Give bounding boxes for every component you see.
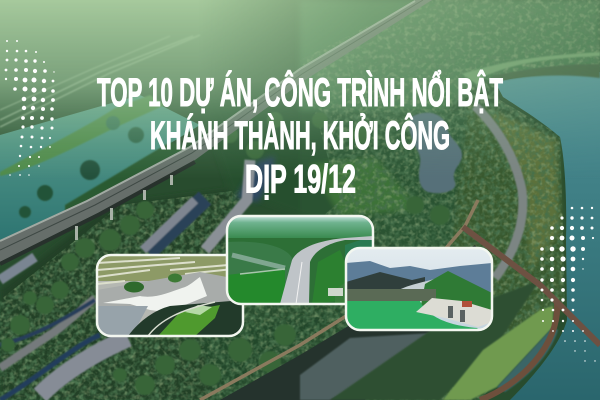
halftone dots left — [5, 40, 55, 176]
tree clumps — [1, 112, 450, 395]
pale service road along lake — [475, 106, 523, 278]
left island — [0, 95, 165, 176]
central dark pond — [236, 156, 275, 202]
inner lagoon — [497, 327, 558, 392]
top green fog — [0, 0, 600, 180]
halftone dots right — [540, 207, 596, 362]
title — [97, 68, 503, 202]
brown bridge — [463, 227, 600, 345]
brown causeway — [480, 303, 557, 400]
canal brown bank — [200, 200, 478, 400]
light green bank — [443, 306, 553, 400]
far forest shade by canal — [330, 280, 540, 400]
card: airport — [97, 255, 243, 336]
left water — [0, 95, 200, 250]
lake top embankment — [462, 52, 600, 90]
bank and trees on left — [19, 116, 195, 225]
pale road curves — [0, 160, 250, 400]
highway pillars — [75, 175, 173, 240]
lake — [495, 72, 600, 400]
pond — [409, 113, 462, 193]
card: highway interchange — [227, 216, 373, 304]
canal with reflection — [220, 245, 490, 400]
title line 3: DỊP 19/12 — [245, 158, 356, 202]
card: hydropower dam — [346, 248, 492, 330]
highway — [0, 0, 432, 264]
faded road upper left — [0, 35, 200, 127]
